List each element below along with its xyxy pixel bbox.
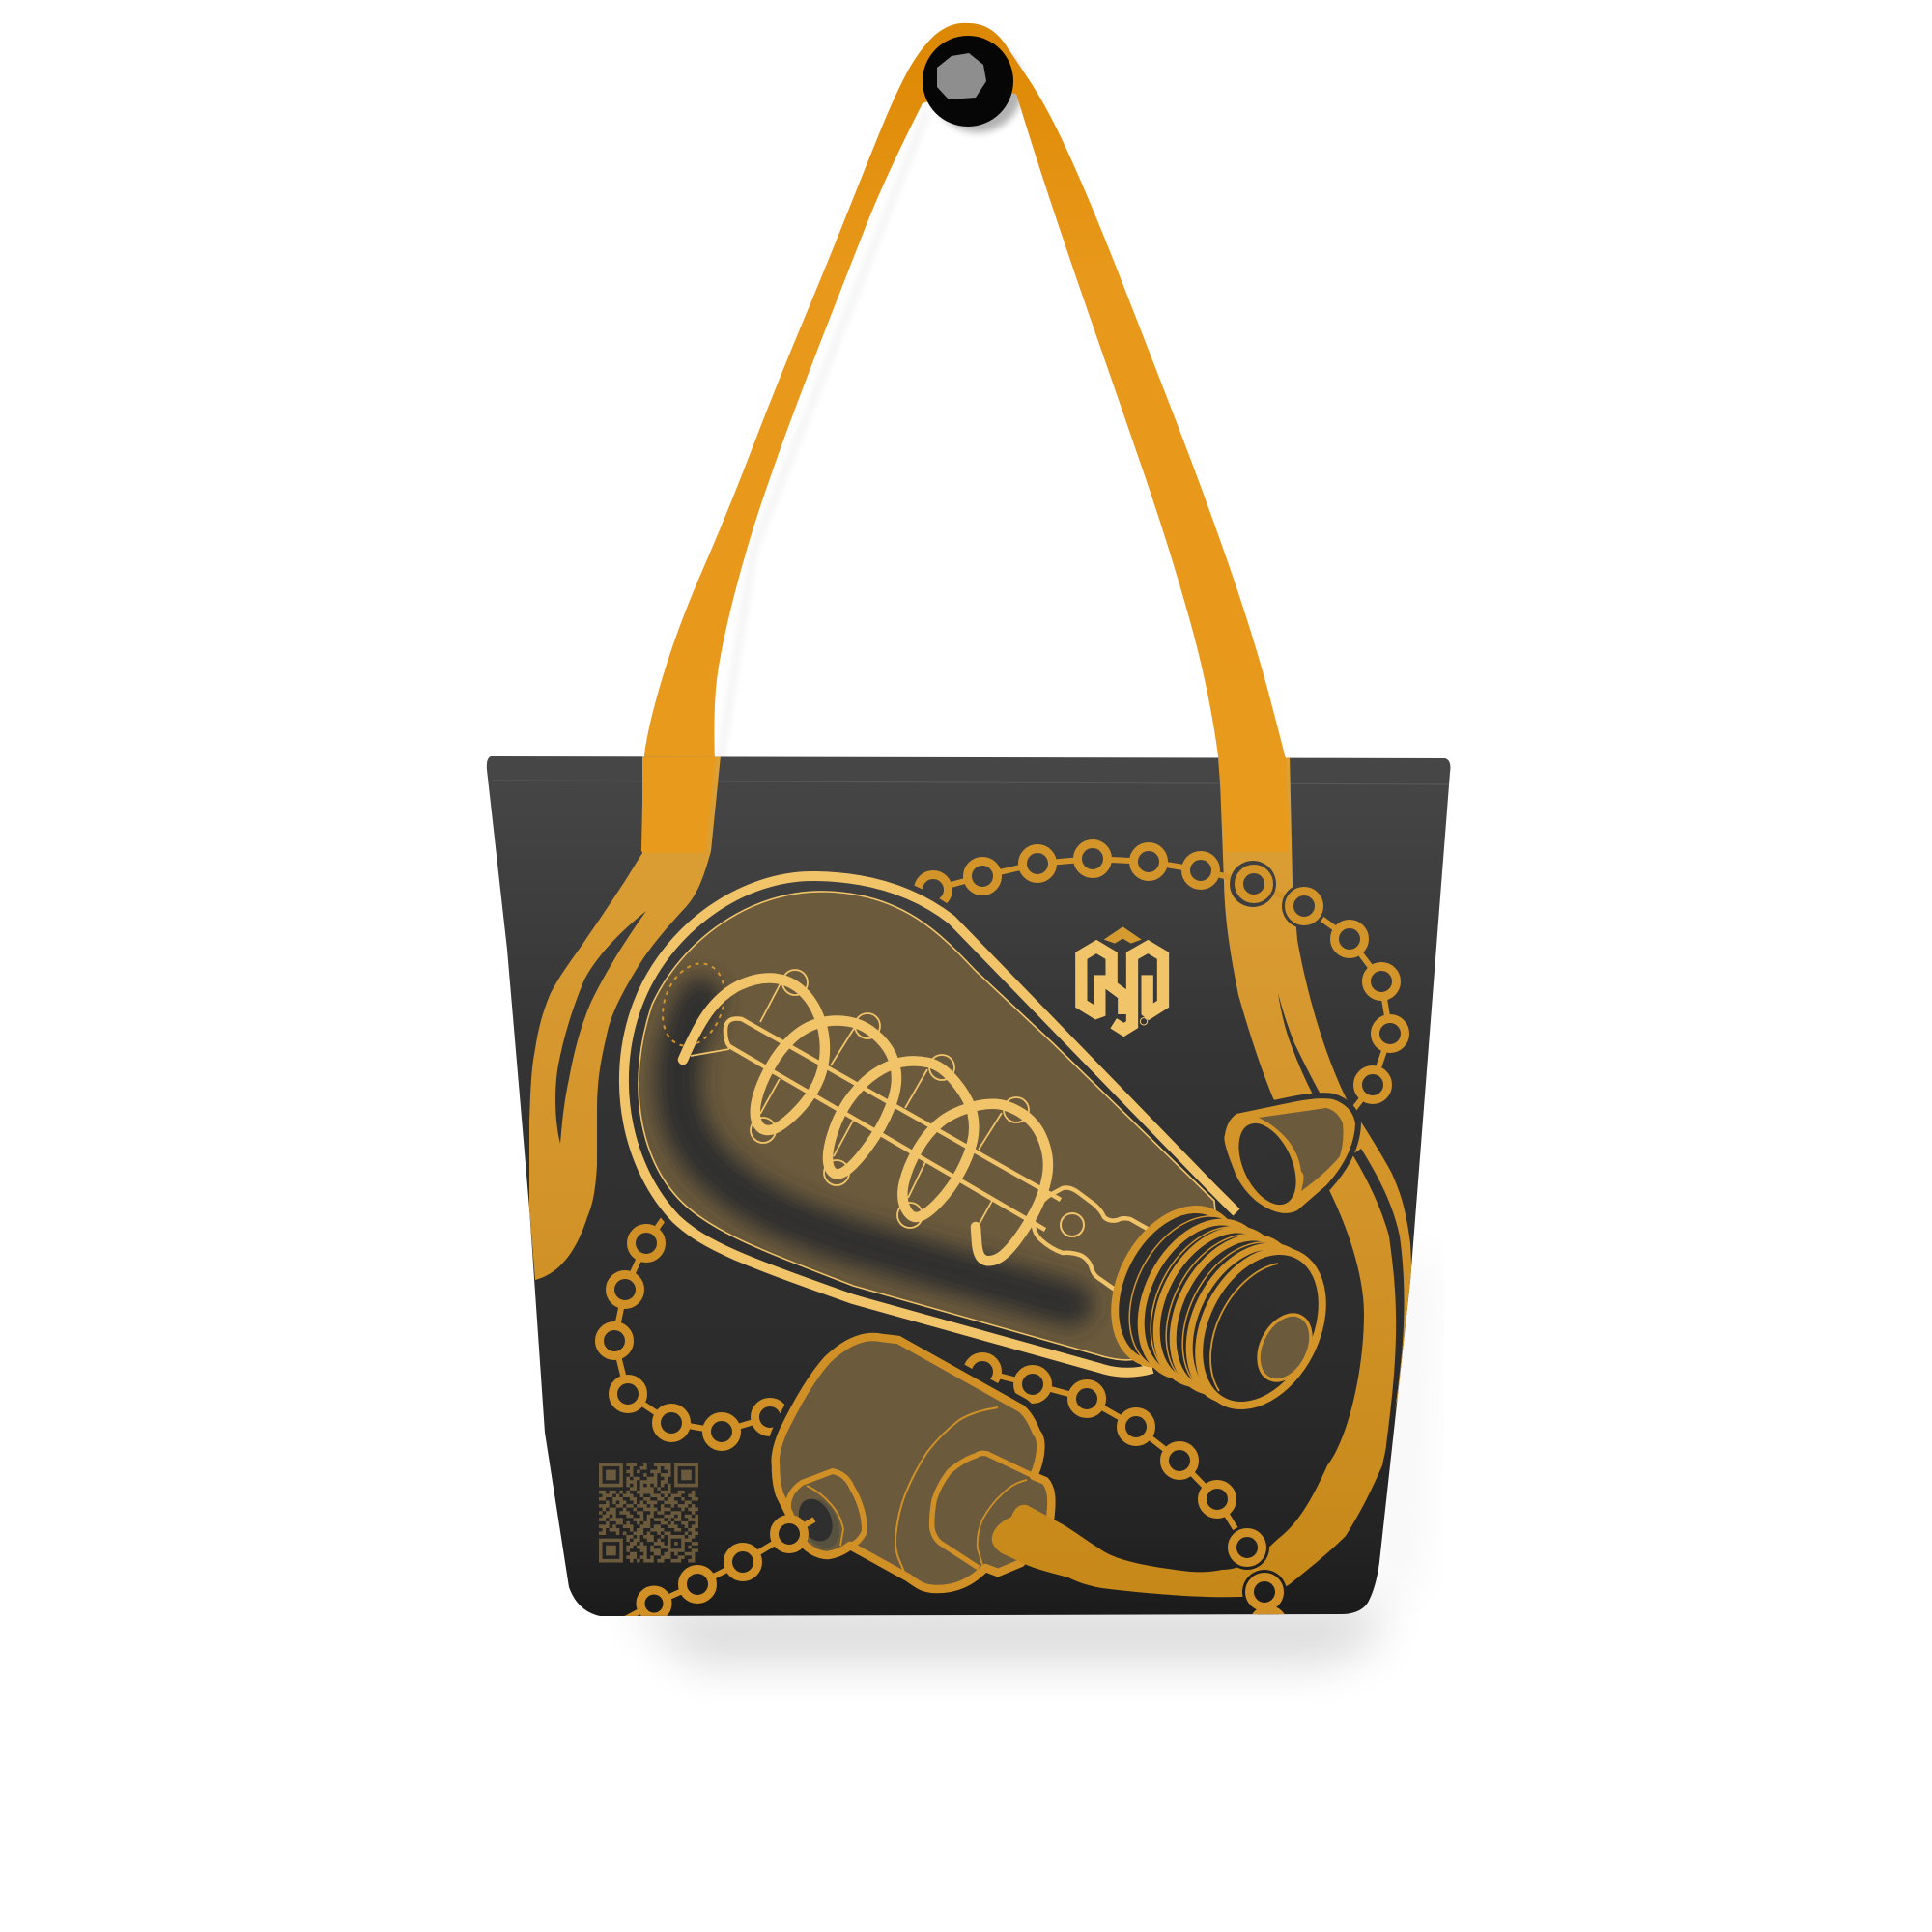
bulb halo <box>661 885 947 1223</box>
left cord slit <box>555 911 646 1144</box>
thin support wires <box>691 983 1002 1227</box>
lower cord slit <box>1352 1149 1405 1454</box>
cord stub entering holder <box>992 1505 1099 1577</box>
faint shadow right of bag <box>1381 1256 1430 1594</box>
soft shadow under bag <box>628 1594 1381 1663</box>
cone brown side <box>1259 1108 1344 1191</box>
dotted highlight <box>662 962 724 1047</box>
hem line <box>493 781 1449 784</box>
tote bag product scene <box>487 23 1451 1679</box>
holder right collar <box>932 1453 1034 1568</box>
printed artwork <box>493 755 1449 1640</box>
shoulder straps <box>644 23 1287 763</box>
holder right collar inner <box>978 1480 1027 1565</box>
spiral filament <box>683 978 1048 1261</box>
holder left collar <box>788 1471 865 1546</box>
holder halo <box>769 1364 1032 1567</box>
QR finder patterns <box>601 1464 696 1561</box>
peg shadow <box>932 42 1023 132</box>
left strap tab on bag <box>641 757 716 853</box>
lamp holder <box>776 1337 1051 1589</box>
holder body <box>776 1337 1051 1589</box>
holder thin contour <box>895 1407 998 1577</box>
strap soft shadow <box>720 111 927 763</box>
hanging peg <box>923 36 1013 127</box>
bulb outline <box>624 876 1236 1373</box>
QR data modules <box>599 1464 698 1561</box>
lower left chain <box>599 1217 784 1447</box>
right strap tab on bag <box>1218 757 1289 852</box>
right and lower power cord <box>991 755 1411 1597</box>
light bulb <box>624 876 1347 1427</box>
bottom left chain <box>618 1519 814 1623</box>
pull cord cone <box>1224 1098 1355 1213</box>
peg grey centre <box>937 53 986 99</box>
bulb glass fill <box>639 892 1219 1372</box>
cone opening <box>1238 1122 1296 1206</box>
brand logo <box>1081 926 1163 1030</box>
left cord flame shape <box>529 755 721 1280</box>
lower right chain <box>968 1356 1287 1640</box>
base contact tip <box>1257 1313 1313 1382</box>
holder left collar inner <box>807 1486 843 1546</box>
stem circle <box>1061 1213 1084 1236</box>
upper chain <box>918 844 1405 1111</box>
cone halo <box>1274 1093 1361 1190</box>
bulb inner shadow <box>677 1000 1070 1304</box>
filament rings <box>751 970 1029 1228</box>
QR code <box>599 1464 698 1561</box>
QR finder centres <box>606 1475 692 1550</box>
filament support rod <box>725 1019 1061 1230</box>
screw base <box>1111 1206 1326 1409</box>
upper cord slit <box>1278 993 1321 1096</box>
holder chain opening <box>798 1498 839 1548</box>
tote bag body <box>487 756 1450 1616</box>
cone body <box>1224 1098 1355 1213</box>
base inner contour <box>1210 1264 1278 1391</box>
stem wires <box>1034 1188 1152 1292</box>
